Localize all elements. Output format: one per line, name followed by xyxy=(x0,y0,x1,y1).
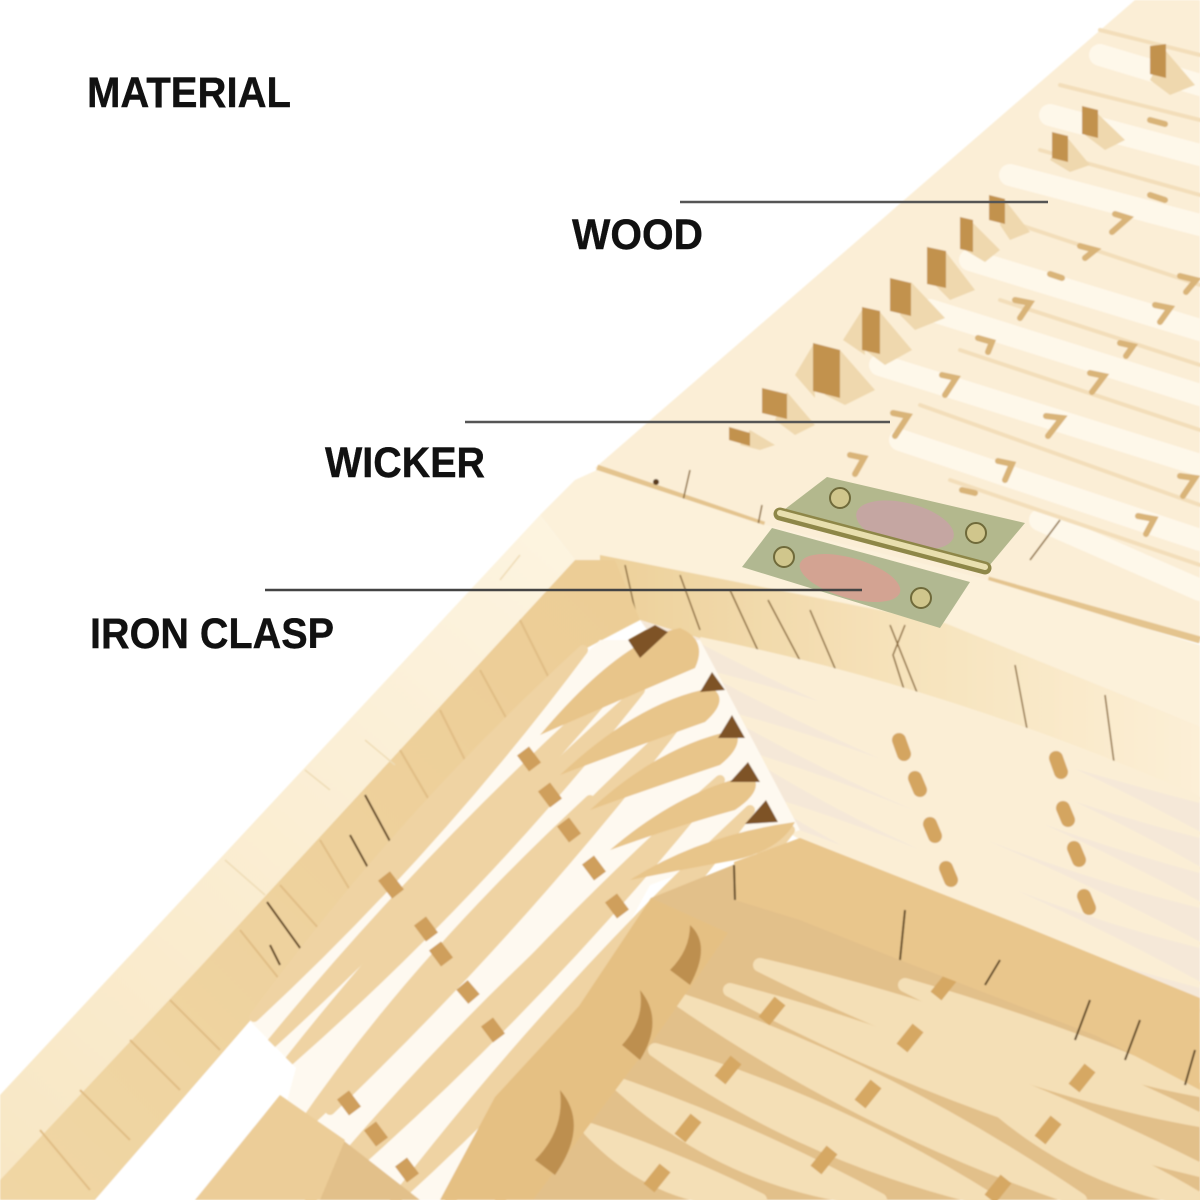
left inner wall xyxy=(250,625,800,1200)
lid rim crease shading xyxy=(597,468,1200,640)
upper hinge plate xyxy=(776,477,1025,572)
label: wood: WOOD xyxy=(572,211,703,259)
basket floor xyxy=(195,838,1200,1200)
floor left band xyxy=(440,898,728,1200)
left wall knots xyxy=(343,751,623,1178)
shaded recesses beside holes xyxy=(740,50,1195,450)
leader line: iron clasp xyxy=(265,589,862,591)
upper plate tint patch xyxy=(851,492,959,558)
left rim inner face xyxy=(0,555,640,1200)
hinge pin xyxy=(780,513,985,568)
lower plate tint patch xyxy=(795,544,905,612)
weave holes along lid edge xyxy=(729,44,1166,446)
label: wicker: WICKER xyxy=(325,439,485,487)
weave knots on lid xyxy=(850,120,1196,534)
floor bottom-left strip area xyxy=(195,1095,345,1200)
title: MATERIAL xyxy=(87,69,291,117)
left rim top xyxy=(0,515,575,1180)
screws xyxy=(774,488,986,608)
iron clasp hinge xyxy=(742,477,1025,628)
box rim top xyxy=(540,470,1200,726)
leader line: wicker xyxy=(465,421,890,423)
label: iron clasp: IRON CLASP xyxy=(90,610,334,658)
right wall knots xyxy=(899,740,1089,908)
lower hinge plate xyxy=(742,528,970,628)
right inner wall xyxy=(640,620,1200,1012)
leader line: wood xyxy=(680,201,1048,203)
floor front band xyxy=(734,838,1200,1090)
white gap in the left side xyxy=(95,1022,296,1200)
basket lid top xyxy=(595,0,1200,640)
corner leaf strips xyxy=(540,628,795,880)
box rim inner face xyxy=(600,555,1200,800)
